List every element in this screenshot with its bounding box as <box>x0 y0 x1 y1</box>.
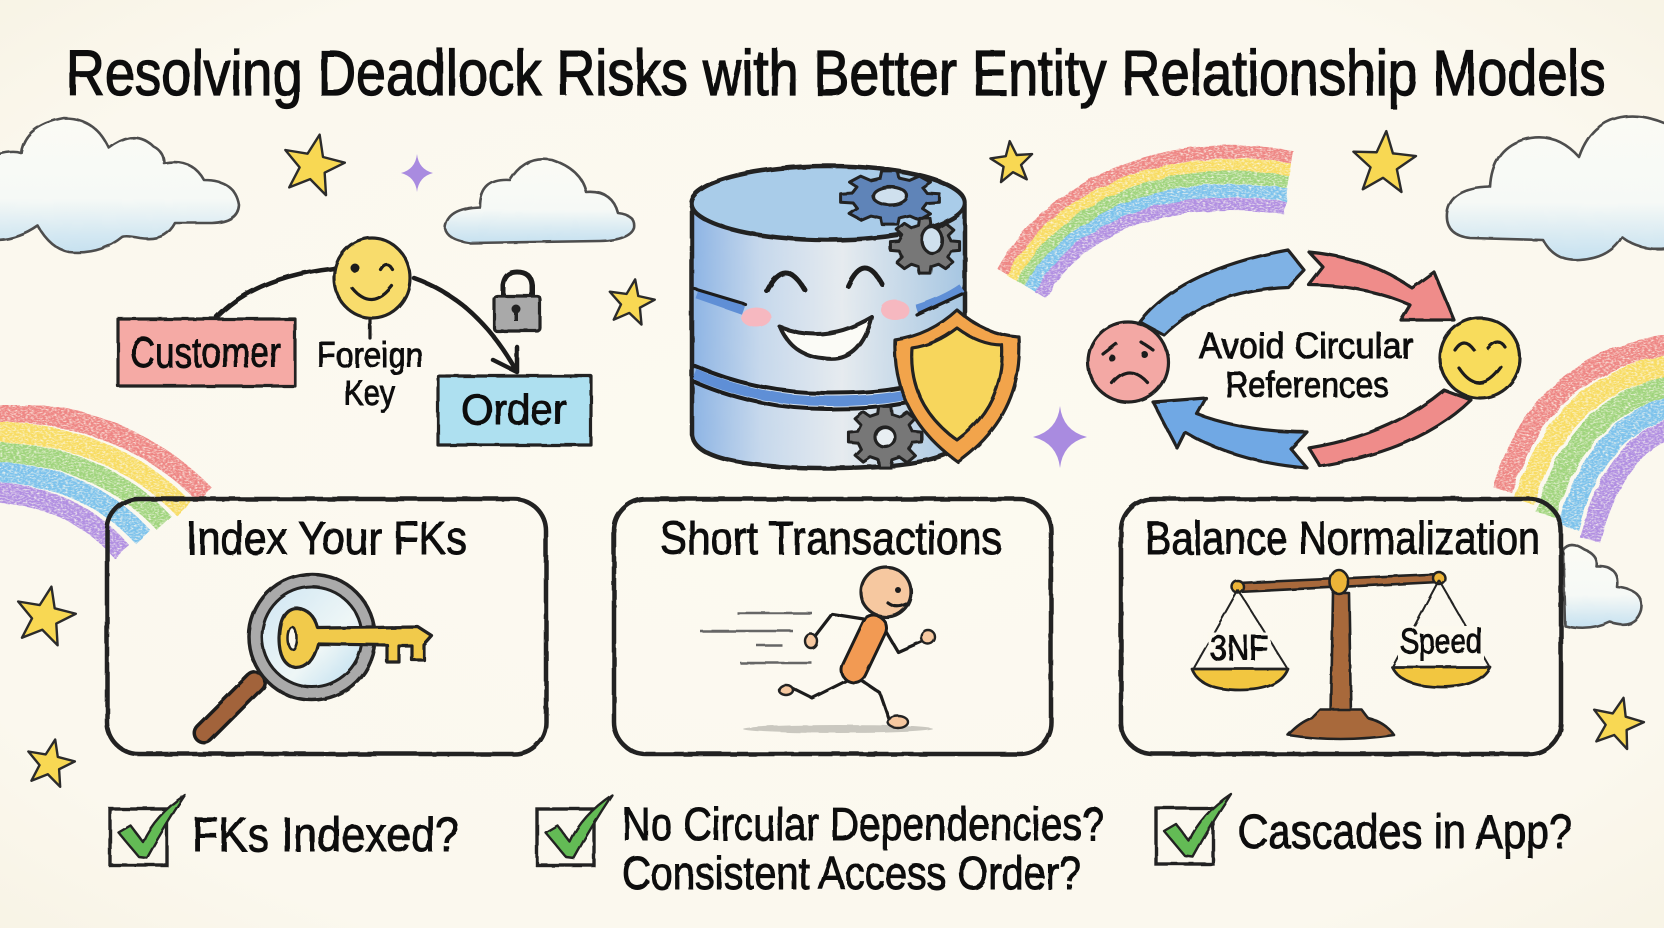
rainbow: top right <box>1003 152 1292 295</box>
cloud: top left <box>0 118 239 252</box>
label: foreign key: Key <box>344 374 395 413</box>
checklist: dependencies and access order: Consistent Access Order? <box>622 847 1081 899</box>
label: foreign key <box>317 336 423 413</box>
icon: shield <box>895 310 1019 462</box>
rainbow: left <box>0 412 205 552</box>
entity: order: Order <box>461 386 567 434</box>
icon: happy face <box>1440 318 1520 398</box>
checklist: cascades in app: Cascades in App? <box>1238 806 1572 859</box>
checklist: cascades in app <box>1156 794 1572 864</box>
checklist: dependencies and access order <box>537 795 1104 899</box>
checklist: dependencies and access order: No Circular Dependencies? <box>622 798 1104 850</box>
database top <box>691 166 965 240</box>
label: 3NF: 3NF <box>1210 629 1268 668</box>
arrow: foreign key to order <box>414 278 517 372</box>
panel: short transactions <box>614 499 1051 754</box>
icon: sad face <box>1088 322 1168 402</box>
heading: Index Your FKs <box>186 512 467 564</box>
heading: Balance Normalization <box>1145 512 1540 564</box>
arrow: blue top <box>1140 250 1304 335</box>
entity: customer <box>118 319 295 386</box>
gear: bottom <box>848 406 922 468</box>
panel: index your FKs <box>107 499 546 754</box>
diagram: avoid circular references <box>1088 250 1520 468</box>
label: speed: Speed <box>1400 622 1482 661</box>
label: avoid circular references <box>1199 325 1413 405</box>
icon: winking smiley <box>334 238 410 318</box>
face <box>741 268 909 359</box>
label: foreign key: Foreign <box>317 336 423 375</box>
label: avoid circular references: References <box>1225 364 1389 405</box>
label: avoid circular references: Avoid Circular <box>1199 325 1413 366</box>
heading: Short Transactions <box>660 512 1002 564</box>
panel: balance normalization <box>1121 499 1561 754</box>
database bands <box>695 288 962 409</box>
cloud: top right <box>1447 116 1664 260</box>
cloud: small top centre <box>445 159 634 243</box>
entity: order <box>438 376 591 445</box>
rainbow: right <box>1502 345 1664 540</box>
gear: top <box>841 171 939 225</box>
icon: running figure <box>700 567 935 733</box>
cloud: small right behind panel <box>1563 545 1642 628</box>
gear: right <box>890 218 960 274</box>
arrow: blue bottom <box>1153 398 1307 468</box>
arrow: customer to foreign key <box>217 268 334 317</box>
checklist: FKs indexed <box>110 795 459 865</box>
diagram: foreign key relationship <box>118 238 591 445</box>
icon: padlock <box>494 272 540 331</box>
icon: balance scale <box>1192 570 1490 739</box>
database body <box>692 205 965 468</box>
entity: customer: Customer <box>130 329 281 377</box>
checklist: FKs indexed: FKs Indexed? <box>192 809 459 862</box>
icon: smiling database <box>691 166 1019 468</box>
icon: magnifier and key <box>204 574 432 733</box>
decorative stars and sparkles <box>11 128 1648 789</box>
arrow: red top <box>1309 252 1454 320</box>
arrow: red bottom <box>1309 390 1471 466</box>
